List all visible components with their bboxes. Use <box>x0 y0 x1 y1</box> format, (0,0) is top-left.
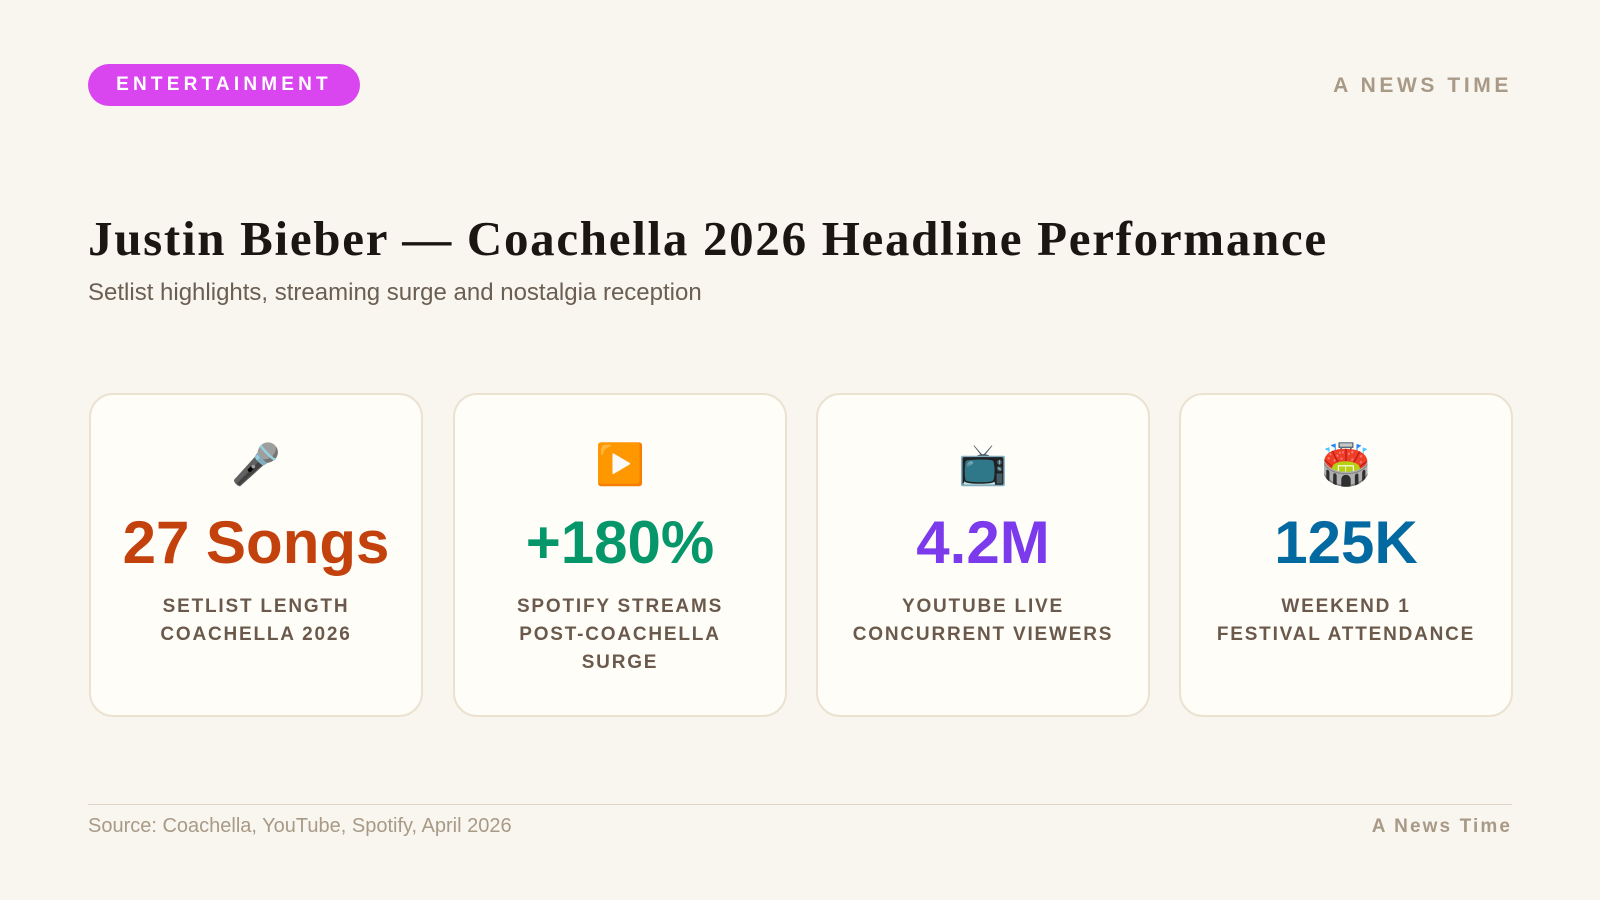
value: 27 songs: 27 Songs <box>123 509 389 576</box>
label: setlist: SETLIST LENGTH <box>163 596 349 617</box>
icon: play: ▶️ <box>595 443 645 487</box>
value: 4.2M: 4.2M <box>916 509 1050 576</box>
icon: stadium: 🏟️ <box>1321 443 1371 487</box>
category pill <box>88 64 360 106</box>
panel: youtube <box>816 393 1150 717</box>
label: setlist: COACHELLA 2026 <box>160 624 352 645</box>
value: +180%: +180% <box>526 509 714 576</box>
category pill: ENTERTAINMENT <box>116 74 332 95</box>
panel: spotify <box>453 393 787 717</box>
label: spotify: SPOTIFY STREAMS <box>517 596 723 617</box>
value: 125K: 125K <box>1274 509 1418 576</box>
title: Justin Bieber — Coachella 2026 Headline Performance <box>88 211 1328 266</box>
source note: Source: Coachella, YouTube, Spotify, April 2026 <box>88 815 512 837</box>
label: youtube <box>853 596 1113 645</box>
panel: attendance <box>1179 393 1513 717</box>
label: spotify: POST-COACHELLA <box>519 624 721 645</box>
footer brand: A News Time <box>1372 816 1512 837</box>
panel: setlist <box>89 393 423 717</box>
label: spotify <box>517 596 723 673</box>
brand header: A NEWS TIME <box>1333 74 1512 97</box>
subtitle: Setlist highlights, streaming surge and nostalgia reception <box>88 279 702 306</box>
icon: microphone: 🎤 <box>231 443 281 487</box>
label: spotify: SURGE <box>582 652 658 673</box>
label: youtube: YOUTUBE LIVE <box>902 596 1064 617</box>
label: attendance: FESTIVAL ATTENDANCE <box>1217 624 1475 645</box>
label: attendance <box>1217 596 1475 645</box>
label: setlist <box>160 596 352 645</box>
label: attendance: WEEKEND 1 <box>1281 596 1411 617</box>
label: youtube: CONCURRENT VIEWERS <box>853 624 1113 645</box>
icon: tv: 📺 <box>958 443 1008 487</box>
